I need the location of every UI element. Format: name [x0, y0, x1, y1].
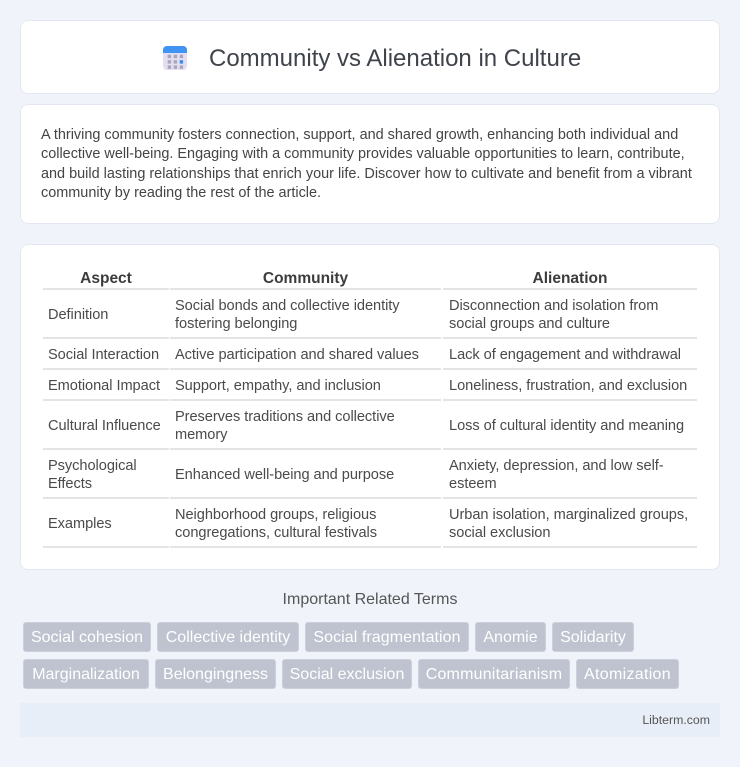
footer source: Libterm.com: [642, 713, 710, 727]
tag: [475, 622, 546, 652]
tag: [552, 622, 634, 652]
row: Emotional Impact: Loneliness, frustration, and exclusion: [449, 378, 687, 394]
row: Psychological Effects: Anxiety, depression, and low self-: [449, 458, 664, 474]
tag: [155, 659, 276, 689]
row: Psychological Effects: Psychological: [48, 458, 137, 474]
row: Psychological Effects: esteem: [449, 476, 497, 492]
row: Cultural Influence: Preserves traditions and collective: [175, 409, 395, 425]
tag: Anomie: [483, 629, 538, 646]
tag: [23, 659, 149, 689]
row: Cultural Influence: [48, 409, 684, 443]
tag: Collective identity: [166, 629, 290, 646]
tag: Solidarity: [560, 629, 626, 646]
row: Examples: social exclusion: [449, 525, 550, 541]
footer bar: [20, 703, 720, 737]
tag: [576, 659, 679, 689]
tag: [157, 622, 299, 652]
row: Examples: Examples: [48, 516, 112, 532]
intro text: collective well-being. Engaging with a community provides valuable opportunities to learn, contribute,: [41, 146, 685, 162]
tag: [418, 659, 570, 689]
tag: Marginalization: [32, 666, 140, 683]
comparison table panel: [20, 244, 720, 570]
row: Emotional Impact: Support, empathy, and inclusion: [175, 378, 381, 394]
column heading: Alienation: Alienation: [533, 270, 607, 286]
row: Emotional Impact: [48, 378, 687, 394]
icon: calendar: [163, 46, 187, 70]
row: Psychological Effects: Enhanced well-being and purpose: [175, 467, 394, 483]
tag: [23, 622, 151, 652]
column heading: Aspect: Aspect: [80, 270, 132, 286]
row: Cultural Influence: Cultural Influence: [48, 418, 161, 434]
intro text: community by reading the rest of the article.: [41, 185, 321, 201]
row: Examples: Urban isolation, marginalized groups,: [449, 507, 688, 523]
row: Definition: social groups and culture: [449, 316, 610, 332]
tag: Communitarianism: [426, 666, 562, 683]
row: Social Interaction: [48, 347, 681, 363]
tag: [282, 659, 412, 689]
row: Psychological Effects: Effects: [48, 476, 92, 492]
row: Examples: Neighborhood groups, religious: [175, 507, 376, 523]
row: Examples: [48, 507, 688, 541]
row: Social Interaction: Lack of engagement and withdrawal: [449, 347, 681, 363]
row: Psychological Effects: [48, 458, 664, 492]
row: Definition: [48, 298, 658, 332]
header panel: [20, 20, 720, 94]
row: Social Interaction: Active participation and shared values: [175, 347, 419, 363]
row: Cultural Influence: memory: [175, 427, 227, 443]
intro text: [41, 127, 692, 201]
row: Examples: congregations, cultural festivals: [175, 525, 377, 541]
tag: Social fragmentation: [313, 629, 461, 646]
tag: Belongingness: [163, 666, 268, 683]
tag: Atomization: [584, 666, 671, 683]
row: Cultural Influence: Loss of cultural identity and meaning: [449, 418, 684, 434]
column heading: Community: Community: [263, 270, 348, 286]
row: Definition: Definition: [48, 307, 108, 323]
intro text: and build lasting relationships that enrich your life. Discover how to cultivate and benefit from a vibrant: [41, 166, 692, 182]
title: Community vs Alienation in Culture: [209, 45, 581, 72]
related terms heading: Important Related Terms: [283, 591, 457, 608]
intro text: A thriving community fosters connection, support, and shared growth, enhancing both individual and: [41, 127, 678, 143]
tag: Social cohesion: [31, 629, 143, 646]
row: Definition: Disconnection and isolation from: [449, 298, 658, 314]
row: Definition: fostering belonging: [175, 316, 297, 332]
tag: Social exclusion: [290, 666, 404, 683]
tag: [305, 622, 469, 652]
intro panel: [20, 104, 720, 224]
row: Emotional Impact: Emotional Impact: [48, 378, 160, 394]
row: Social Interaction: Social Interaction: [48, 347, 159, 363]
row: Definition: Social bonds and collective identity: [175, 298, 400, 314]
